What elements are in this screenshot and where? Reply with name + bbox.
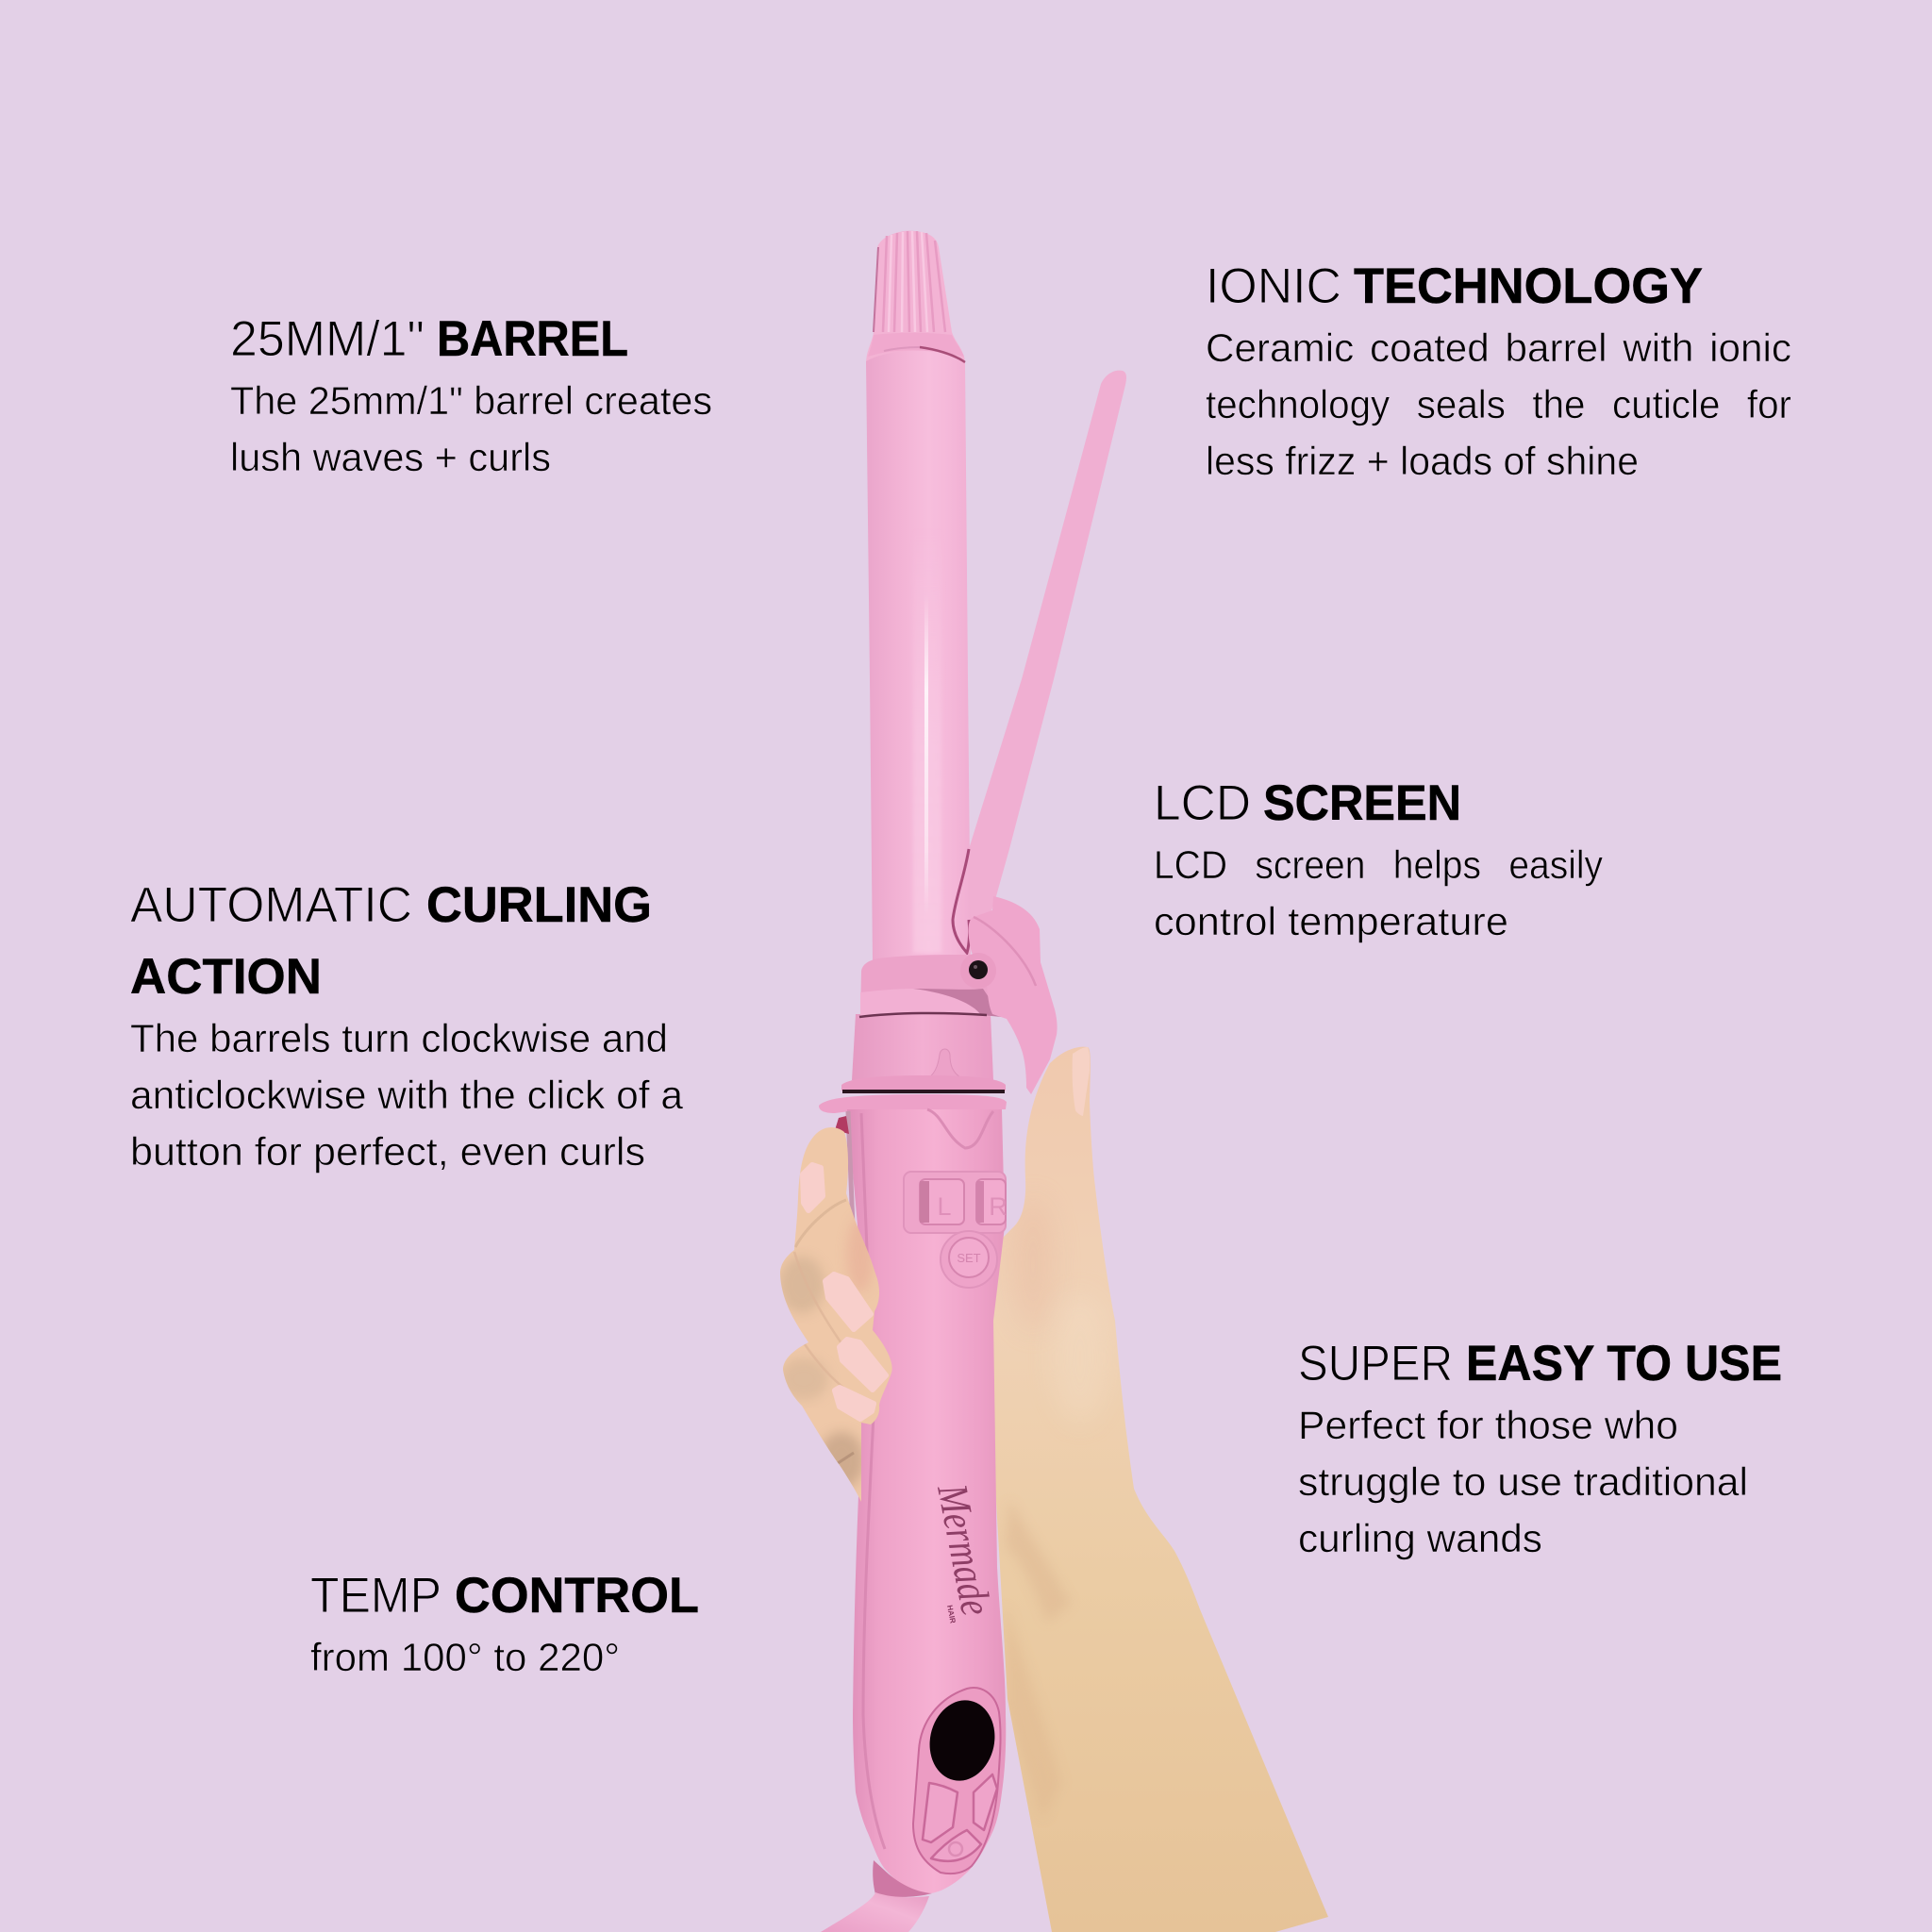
set button: SET — [957, 1251, 981, 1265]
body: barrel: lush waves + curls — [230, 435, 551, 479]
heading: ionic technology — [1206, 258, 1703, 314]
illustration: hand holding pink curling wand — [779, 231, 1328, 1932]
flanges — [819, 1075, 1007, 1113]
heading: automatic curling action — [130, 877, 652, 1005]
brand script: Mermade — [928, 1479, 1001, 1619]
body: temp control: from 100° to 220° — [310, 1635, 620, 1679]
heading: ionic technology: TECHNOLOGY — [1354, 258, 1703, 314]
feature: lcd screen — [1154, 775, 1603, 943]
upper neck — [852, 1014, 993, 1080]
lcd screen — [923, 1694, 1002, 1787]
feature: barrel — [230, 311, 712, 479]
body: automatic curling action: The barrels turn clockwise and — [130, 1016, 668, 1060]
barrel — [866, 347, 971, 962]
heading: lcd screen: LCD — [1154, 775, 1251, 831]
heading: ionic technology: IONIC — [1206, 258, 1341, 314]
heading: super easy to use: SUPER — [1298, 1336, 1453, 1391]
body: lcd screen — [1154, 842, 1603, 943]
power cord — [821, 1860, 932, 1932]
body: ionic technology: less frizz + loads of shine — [1206, 439, 1639, 483]
body: lcd screen: control temperature — [1154, 899, 1508, 943]
body: automatic curling action: anticlockwise with the click of a — [130, 1073, 684, 1117]
heading: temp control: CONTROL — [455, 1568, 699, 1624]
direction buttons L and R: R — [989, 1192, 1008, 1221]
drip detail — [927, 1109, 993, 1148]
lever — [968, 896, 1058, 1094]
panel buttons — [923, 1774, 997, 1861]
set button — [941, 1231, 997, 1288]
arm and thumb — [986, 1047, 1328, 1932]
body: barrel: The 25mm/1" barrel creates — [230, 378, 712, 423]
direction buttons L and R — [904, 1172, 1008, 1233]
heading: lcd screen: SCREEN — [1263, 775, 1461, 831]
heading: temp control — [310, 1568, 699, 1624]
heading: temp control: TEMP — [310, 1568, 441, 1624]
feature: automatic curling action — [130, 877, 684, 1174]
body: lcd screen: LCD screen helps easily — [1154, 842, 1603, 887]
body: super easy to use — [1298, 1403, 1748, 1560]
neck knob — [929, 1049, 960, 1077]
feature: super easy to use — [1298, 1336, 1782, 1560]
body: ionic technology: technology seals the cuticle for — [1206, 382, 1791, 426]
body: ionic technology — [1206, 325, 1791, 483]
fingers — [779, 1116, 892, 1502]
thumbnail — [1073, 1047, 1090, 1116]
direction buttons L and R: L — [937, 1192, 952, 1221]
clamp arm — [968, 371, 1126, 943]
body: automatic curling action: button for perfect, even curls — [130, 1129, 645, 1174]
control panel — [913, 1688, 1001, 1874]
heading: super easy to use — [1298, 1336, 1782, 1391]
body: super easy to use: struggle to use traditional — [1298, 1459, 1748, 1504]
brand script: HAIR — [945, 1605, 958, 1624]
hinge pin — [960, 953, 996, 989]
heading: automatic curling action: AUTOMATIC — [130, 877, 412, 933]
barrel tip with ribs — [866, 231, 965, 363]
handle — [847, 1109, 1008, 1893]
heading: barrel — [230, 311, 628, 367]
collar ring — [859, 955, 1002, 1017]
fingernails — [803, 1165, 886, 1419]
feature: temp control — [310, 1568, 699, 1679]
heading: automatic curling action: CURLING — [426, 877, 652, 933]
feature: ionic technology — [1206, 258, 1791, 483]
heading: barrel: 25MM/1" — [230, 311, 425, 367]
body: ionic technology: Ceramic coated barrel with ionic — [1206, 325, 1791, 370]
body: automatic curling action — [130, 1016, 684, 1174]
body: super easy to use: Perfect for those who — [1298, 1403, 1678, 1447]
body: barrel — [230, 378, 712, 479]
clamp hinge and groove — [953, 849, 970, 953]
heading: super easy to use: EASY TO USE — [1466, 1336, 1782, 1391]
heading: automatic curling action: ACTION — [130, 949, 322, 1005]
heading: lcd screen — [1154, 775, 1461, 831]
body: super easy to use: curling wands — [1298, 1516, 1542, 1560]
heading: barrel: BARREL — [437, 311, 628, 367]
